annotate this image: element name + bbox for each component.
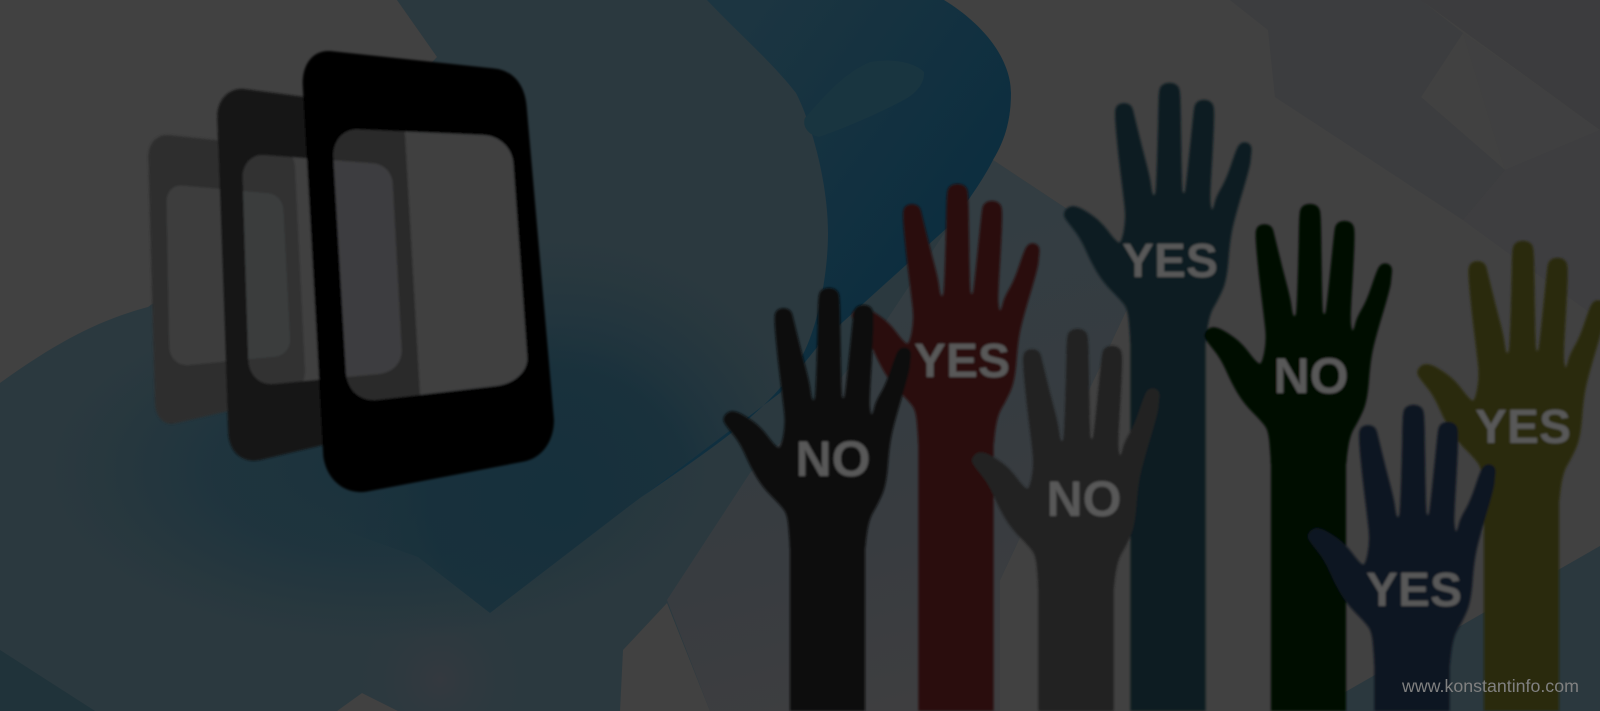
hand: black NO [724, 289, 910, 711]
hand: red YES [853, 185, 1039, 711]
hand: blue YES [1065, 84, 1251, 711]
hand: blue YES: YES [1122, 235, 1218, 288]
icon: front phone [302, 50, 555, 494]
hand: black NO: NO [796, 431, 870, 487]
hand: red YES: YES [914, 335, 1010, 388]
hand: grey NO: NO [1046, 471, 1122, 527]
hand: dark green NO [1205, 205, 1391, 711]
hands group [724, 84, 1600, 711]
hand: dark green NO: NO [1274, 348, 1348, 404]
icon: middle phone [216, 88, 418, 462]
icon: back phone [148, 135, 305, 424]
hand: navy YES: YES [1366, 564, 1462, 617]
logo: three stacked phones [148, 51, 554, 492]
hand: navy YES [1309, 406, 1495, 711]
hand: olive YES [1418, 242, 1600, 711]
website credit: www.konstantinfo.com [1401, 676, 1579, 696]
hand: olive YES: YES [1475, 401, 1571, 454]
hand: grey NO [973, 330, 1159, 711]
